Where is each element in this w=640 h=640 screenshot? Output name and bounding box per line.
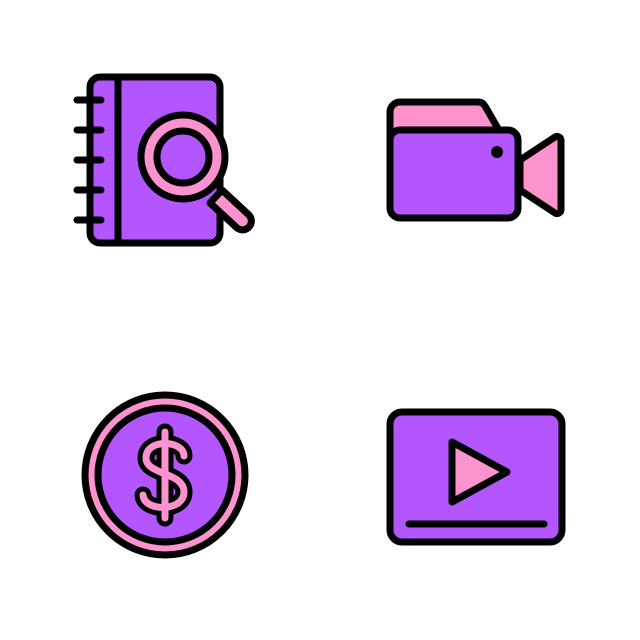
icon: video player	[390, 412, 562, 542]
icon: notebook with magnifier	[77, 77, 251, 243]
icon: video camera	[390, 102, 561, 218]
icon: dollar coin	[85, 395, 245, 555]
